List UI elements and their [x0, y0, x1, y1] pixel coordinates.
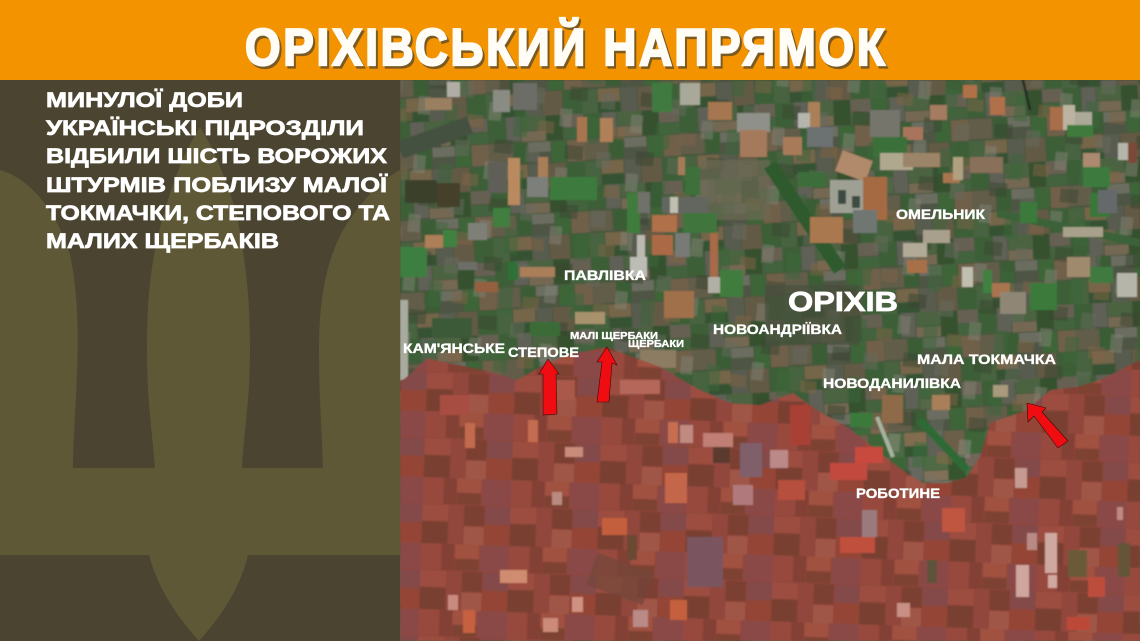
title: ОРІХІВСЬКИЙ НАПРЯМОК	[245, 18, 885, 77]
panel: left text panel with trident	[0, 127, 400, 641]
label: Кам'янське: КАМ'ЯНСЬКЕ	[403, 340, 505, 356]
label: Щербаки: ЩЕРБАКИ	[628, 338, 684, 350]
label: Роботине: РОБОТИНЕ	[856, 485, 940, 501]
icon: trident emblem watermark	[0, 127, 400, 641]
text block: daily summary: МИНУЛОЇ ДОБИ	[46, 89, 243, 112]
text block: daily summary: ШТУРМІВ ПОБЛИЗУ МАЛОЇ	[46, 174, 388, 197]
label: Малі Щербаки: МАЛІ ЩЕРБАКИ	[570, 330, 658, 342]
title: ОРІХІВСЬКИЙ НАПРЯМОК	[247, 21, 887, 79]
text block: daily summary	[46, 89, 390, 253]
arrow: attack toward Stepove	[539, 359, 559, 415]
text block: daily summary: МАЛИХ ЩЕРБАКІВ	[46, 230, 279, 253]
label: Новоданилівка: НОВОДАНИЛІВКА	[823, 375, 961, 391]
label: Павлівка: ПАВЛІВКА	[564, 268, 646, 283]
map fields north of the front line	[400, 80, 1140, 641]
label: Оріхів: ОРІХІВ	[788, 286, 898, 317]
header bar	[0, 0, 1140, 80]
arrow: attack toward Mali Shcherbaky	[597, 347, 617, 402]
text block: daily summary: ТОКМАЧКИ, СТЕПОВОГО ТА	[46, 202, 390, 225]
map place labels	[403, 207, 1056, 501]
label: Новоандріївка: НОВОАНДРІЇВКА	[713, 322, 842, 337]
text block: daily summary: ВІДБИЛИ ШІСТЬ ВОРОЖИХ	[46, 145, 387, 168]
label: Омельник: ОМЕЛЬНИК	[896, 207, 986, 222]
label: Степове: СТЕПОВЕ	[508, 344, 579, 360]
text block: daily summary: УКРАЇНСЬКІ ПІДРОЗДІЛИ	[46, 117, 364, 140]
label: Мала Токмачка: МАЛА ТОКМАЧКА	[917, 351, 1056, 367]
panel: satellite map	[400, 80, 1140, 641]
russian-occupied zone red overlay	[400, 347, 1140, 641]
arrow: attack toward Mala Tokmachka	[1027, 403, 1068, 448]
